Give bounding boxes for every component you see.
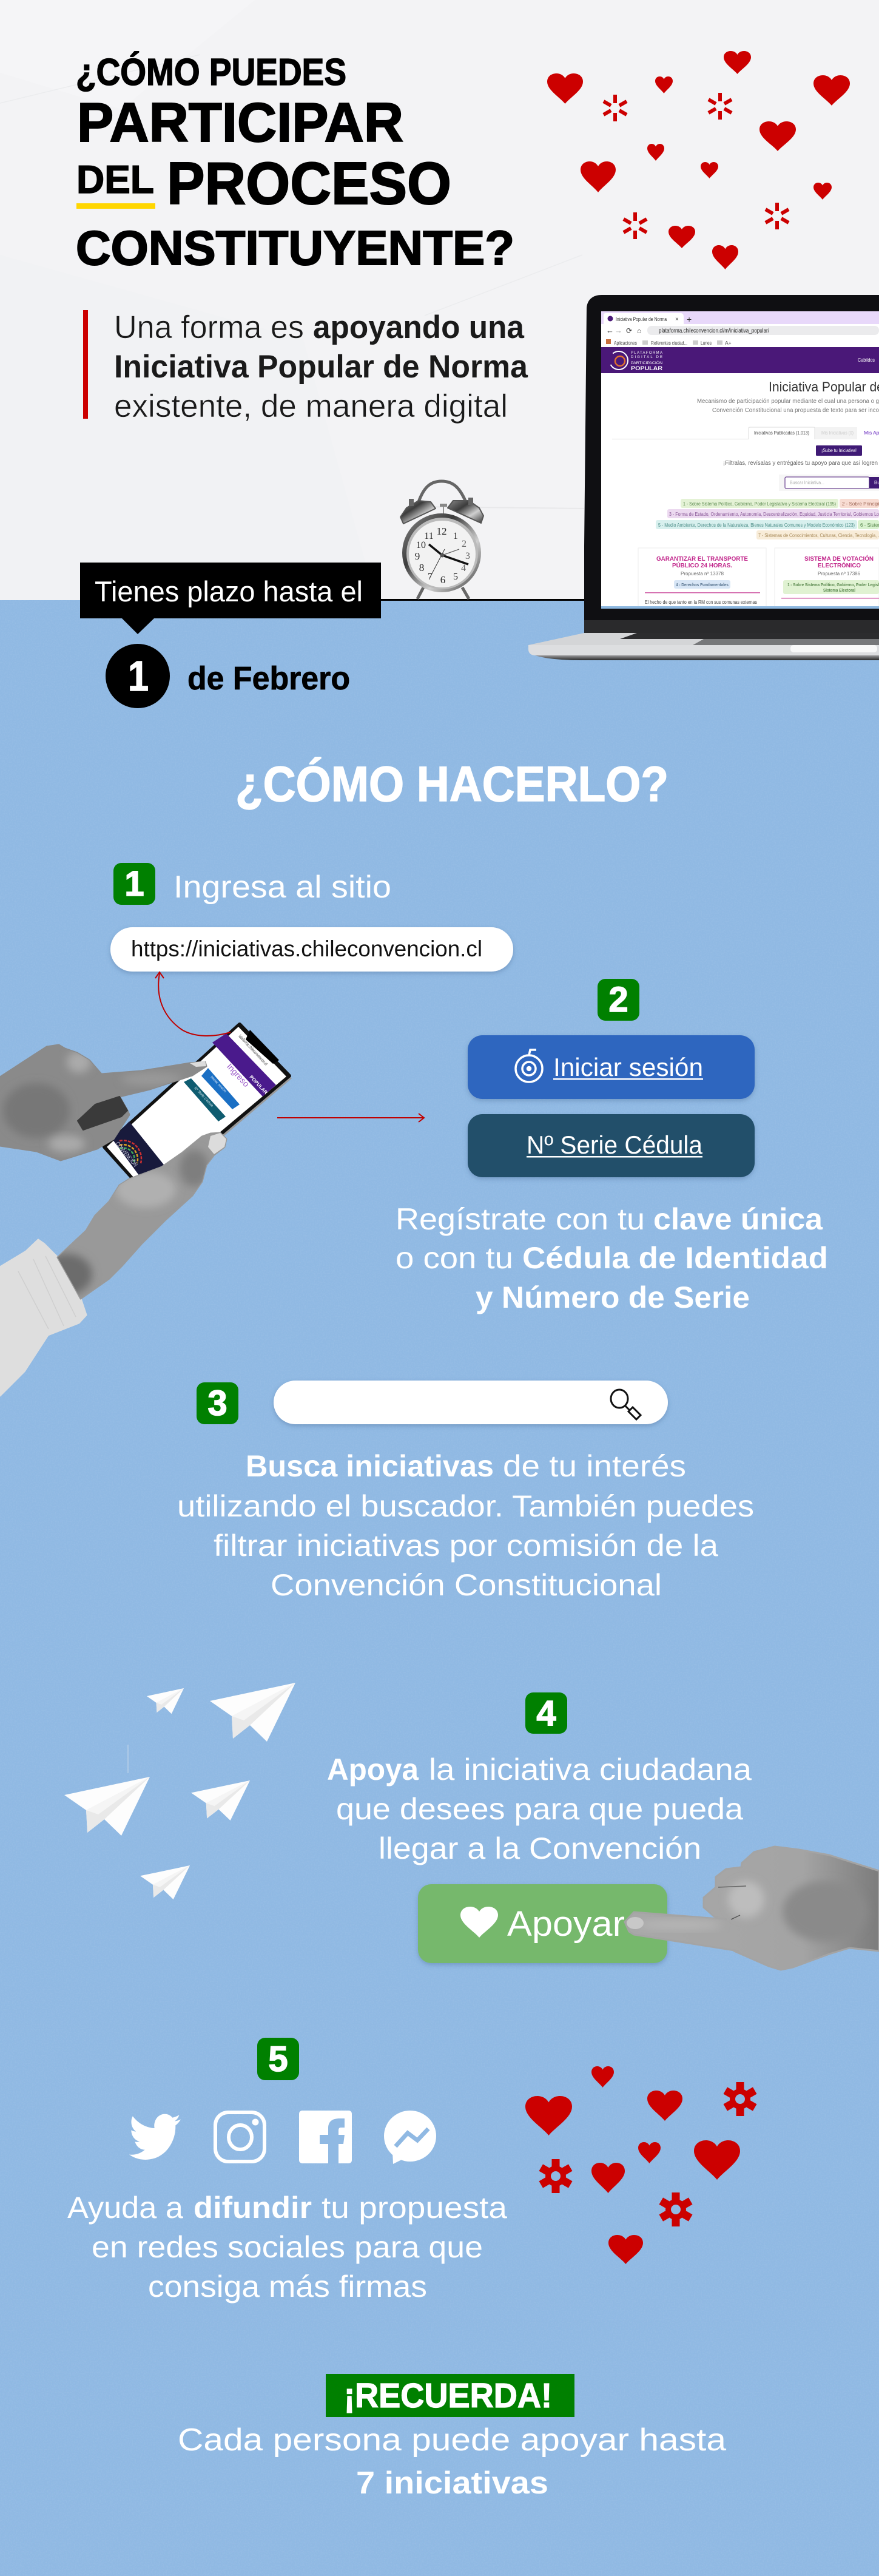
laptop screen: 5 - Medio Ambiente, Derechos de la Naturaleza, Bienes Naturales Comunes y Modelo Económico (123) [658, 522, 855, 528]
step 5 text: difundir [194, 2191, 312, 2225]
clock handle [419, 481, 465, 502]
laptop screen: plataforma.chileconvencion.cl/m/iniciativa_popular/ [659, 327, 769, 334]
screen card 2: Sistema Electoral [823, 587, 855, 593]
screen card 1: PÚBLICO 24 HORAS. [672, 561, 732, 569]
laptop screen: ¡Sube tu Iniciativa! [821, 448, 857, 453]
title [76, 52, 514, 275]
phone: Ingreso [225, 1061, 252, 1089]
screen card 1: El hecho de que tanto en la RM con sus comunas externas [645, 600, 757, 605]
step 4 text: la iniciativa ciudadana [429, 1753, 752, 1787]
laptop screen: POPULAR [631, 365, 662, 372]
laptop base [528, 633, 879, 660]
step 4 text: llegar a la Convención [379, 1831, 701, 1865]
laptop screen: PARTICIPACIÓN [631, 360, 662, 365]
screen card 1: GARANTIZAR EL TRANSPORTE [656, 555, 748, 563]
icon: alarm clock: 9 [415, 550, 420, 562]
laptop screen: DIGITAL DE [631, 356, 662, 359]
laptop screen: → [615, 326, 622, 335]
background: paper top [0, 0, 879, 601]
phone teal button [184, 1078, 226, 1121]
background: blue lower section [0, 600, 879, 2576]
laptop screen: A+ [725, 340, 732, 346]
shelf line [381, 599, 585, 601]
red side bar [83, 310, 88, 419]
laptop screen: Buscar Iniciativa... [790, 480, 824, 485]
step 3 text: de tu interés [503, 1449, 686, 1483]
laptop screen: Aplicaciones [614, 340, 637, 346]
step 5 text: en redes sociales para que [92, 2230, 483, 2264]
laptop screen [601, 311, 879, 609]
screen card 1 [638, 548, 766, 607]
icon: pointing hand [625, 1847, 879, 1970]
icon: lower hand [41, 1133, 226, 1299]
clock bells [400, 498, 483, 524]
icon: upper hand [0, 1045, 206, 1160]
title: PROCESO [167, 150, 451, 217]
arrow: phone to login [277, 1114, 424, 1122]
icon: alarm clock: 1 [453, 531, 458, 541]
phone: Iniciar sesión [210, 1075, 227, 1094]
step 5 text: tu propuesta [322, 2191, 507, 2225]
button: iniciar sesion [468, 1035, 755, 1099]
step 4 text [327, 1753, 752, 1865]
laptop screen: PLATAFORMA [631, 351, 662, 355]
hearts lower group [525, 2066, 740, 2264]
phone: Nº Serie Cédula [194, 1086, 214, 1108]
screen card 1: Propuesta nº 13378 [681, 571, 724, 576]
laptop screen: ⟳ [626, 326, 632, 335]
gears lower group [539, 2082, 756, 2226]
callout: deadline box: Tienes plazo hasta el [95, 575, 363, 607]
step 3 badge: 3 [207, 1384, 227, 1423]
phone: POPULAR [249, 1074, 269, 1095]
step 3 badge [197, 1382, 238, 1424]
intro text: existente, de manera digital [114, 388, 508, 424]
laptop screen: 1 - Sobre Sistema Político, Gobierno, Poder Legislativo y Sistema Electoral (195) [683, 501, 836, 507]
step 1 badge: 1 [124, 864, 144, 904]
laptop screen: + [687, 314, 692, 324]
icon: twitter [129, 2114, 181, 2160]
url pill [110, 927, 513, 972]
step 3 text: Busca iniciativas [246, 1449, 494, 1483]
intro text [114, 309, 528, 424]
intro text: apoyando una [313, 309, 524, 345]
laptop screen: Iniciativa Popular de Norma [616, 316, 667, 323]
icon: sleeve [0, 1240, 86, 1396]
step 1 label: Ingresa al sitio [173, 870, 391, 905]
button: iniciar sesion: Iniciar sesión [553, 1053, 703, 1081]
step 2 text: o con tu [396, 1241, 513, 1275]
step 1 badge [113, 863, 155, 905]
laptop screen: Mis Iniciativas (0) [821, 430, 854, 436]
title: PARTICIPAR [77, 92, 403, 154]
icon: alarm clock: 2 [462, 539, 466, 549]
date label: de Febrero [187, 660, 350, 697]
screen card 2: ELECTRÓNICO [818, 561, 861, 569]
date circle: 1 [128, 652, 149, 700]
search pill [274, 1381, 668, 1424]
step 2 text: Cédula de Identidad [522, 1241, 828, 1275]
step 5 badge: 5 [268, 2040, 288, 2079]
phone [104, 1024, 291, 1195]
icon: magnifier [611, 1390, 641, 1419]
asterisks top group [602, 93, 790, 239]
step 5 badge [257, 2038, 299, 2080]
icon: facebook [299, 2111, 352, 2163]
icon: alarm clock: 11 [424, 531, 434, 541]
step 5 text [67, 2191, 507, 2304]
laptop [528, 295, 879, 660]
phone navy banner [112, 1121, 166, 1176]
step 3 text: Convención Constitucional [271, 1568, 662, 1602]
title underline accent [76, 203, 155, 209]
closing text [178, 2422, 726, 2501]
step 3 text: utilizando el buscador. También puedes [177, 1489, 754, 1523]
date circle [106, 644, 170, 708]
icon: alarm clock [400, 481, 483, 599]
step 2 text: Regístrate con tu [396, 1202, 645, 1236]
closing text: Cada persona puede apoyar hasta [178, 2422, 726, 2458]
phone: CONVENCIÓN [114, 1140, 140, 1168]
button: serie cedula: Nº Serie Cédula [527, 1131, 703, 1159]
laptop screen: × [675, 316, 679, 323]
intro text: Iniciativa Popular de Norma [114, 349, 528, 385]
button: serie cedula [468, 1114, 755, 1177]
laptop lid [584, 295, 879, 633]
laptop screen: Iniciativas Publicadas (1.013) [754, 430, 809, 436]
step 3 text [177, 1449, 754, 1602]
icon: alarm clock: 8 [419, 562, 424, 573]
icon: alarm clock: 6 [440, 574, 445, 586]
step 2 text: y Número de Serie [476, 1280, 750, 1314]
icon: messenger [384, 2111, 436, 2164]
phone blue button [201, 1068, 240, 1109]
icon: alarm clock: 4 [461, 563, 466, 573]
step 5 text: Ayuda a [67, 2191, 183, 2225]
laptop screen: Cabildos [858, 357, 875, 363]
step 2 text [396, 1202, 828, 1314]
screen card 2: SISTEMA DE VOTACIÓN [804, 555, 874, 563]
step 2 badge [598, 979, 639, 1021]
laptop screen: Lunes [701, 340, 712, 346]
icon: clave unica [516, 1050, 542, 1082]
screen card 2: Propuesta nº 17386 [818, 571, 861, 576]
phone purple header [212, 1033, 276, 1097]
heading: como hacerlo: ¿CÓMO HACERLO? [235, 757, 669, 812]
icon: instagram [215, 2112, 264, 2162]
phone notch [246, 1030, 279, 1064]
laptop screen: Referentes ciudad... [651, 340, 687, 346]
icon: alarm clock: 5 [453, 572, 458, 582]
title: CONSTITUYENTE? [76, 221, 514, 275]
callout: deadline box [80, 563, 381, 634]
step 4 text: Apoya [327, 1753, 419, 1787]
intro text: Una forma es [114, 309, 304, 345]
icon: alarm clock: 12 [437, 526, 446, 537]
step 3 text: filtrar iniciativas por comisión de la [214, 1529, 718, 1563]
icon: alarm clock: 7 [428, 572, 433, 582]
step 4 badge [525, 1692, 567, 1734]
screen card 2 [775, 548, 879, 607]
arrow: phone to url [155, 972, 231, 1036]
step 4 badge: 4 [536, 1694, 556, 1733]
step 5 text: consiga más firmas [148, 2270, 427, 2304]
title: ¿CÓMO PUEDES [76, 52, 346, 93]
hearts top group [547, 51, 850, 269]
laptop screen: ⌂ [637, 326, 641, 335]
title: DEL [76, 157, 154, 201]
phone: lataforma.chileconvencion.cl [238, 1033, 269, 1067]
url pill: https://iniciativas.chileconvencion.cl [131, 936, 482, 961]
laptop screen: ← [606, 326, 614, 335]
button: apoyar: Apoyar [507, 1904, 625, 1944]
icon: paper planes [64, 1683, 295, 1899]
step 2 text: clave única [653, 1202, 823, 1236]
button: apoyar [418, 1884, 667, 1963]
closing text: 7 iniciativas [356, 2466, 548, 2501]
callout: recuerda: ¡RECUERDA! [344, 2376, 552, 2415]
screen card 1: 4 - Derechos Fundamentales [676, 582, 729, 587]
step 4 text: que desees para que pueda [336, 1792, 743, 1826]
step 2 badge: 2 [608, 980, 628, 1019]
icon: alarm clock: 3 [465, 551, 470, 561]
icon: alarm clock: 10 [416, 540, 426, 550]
